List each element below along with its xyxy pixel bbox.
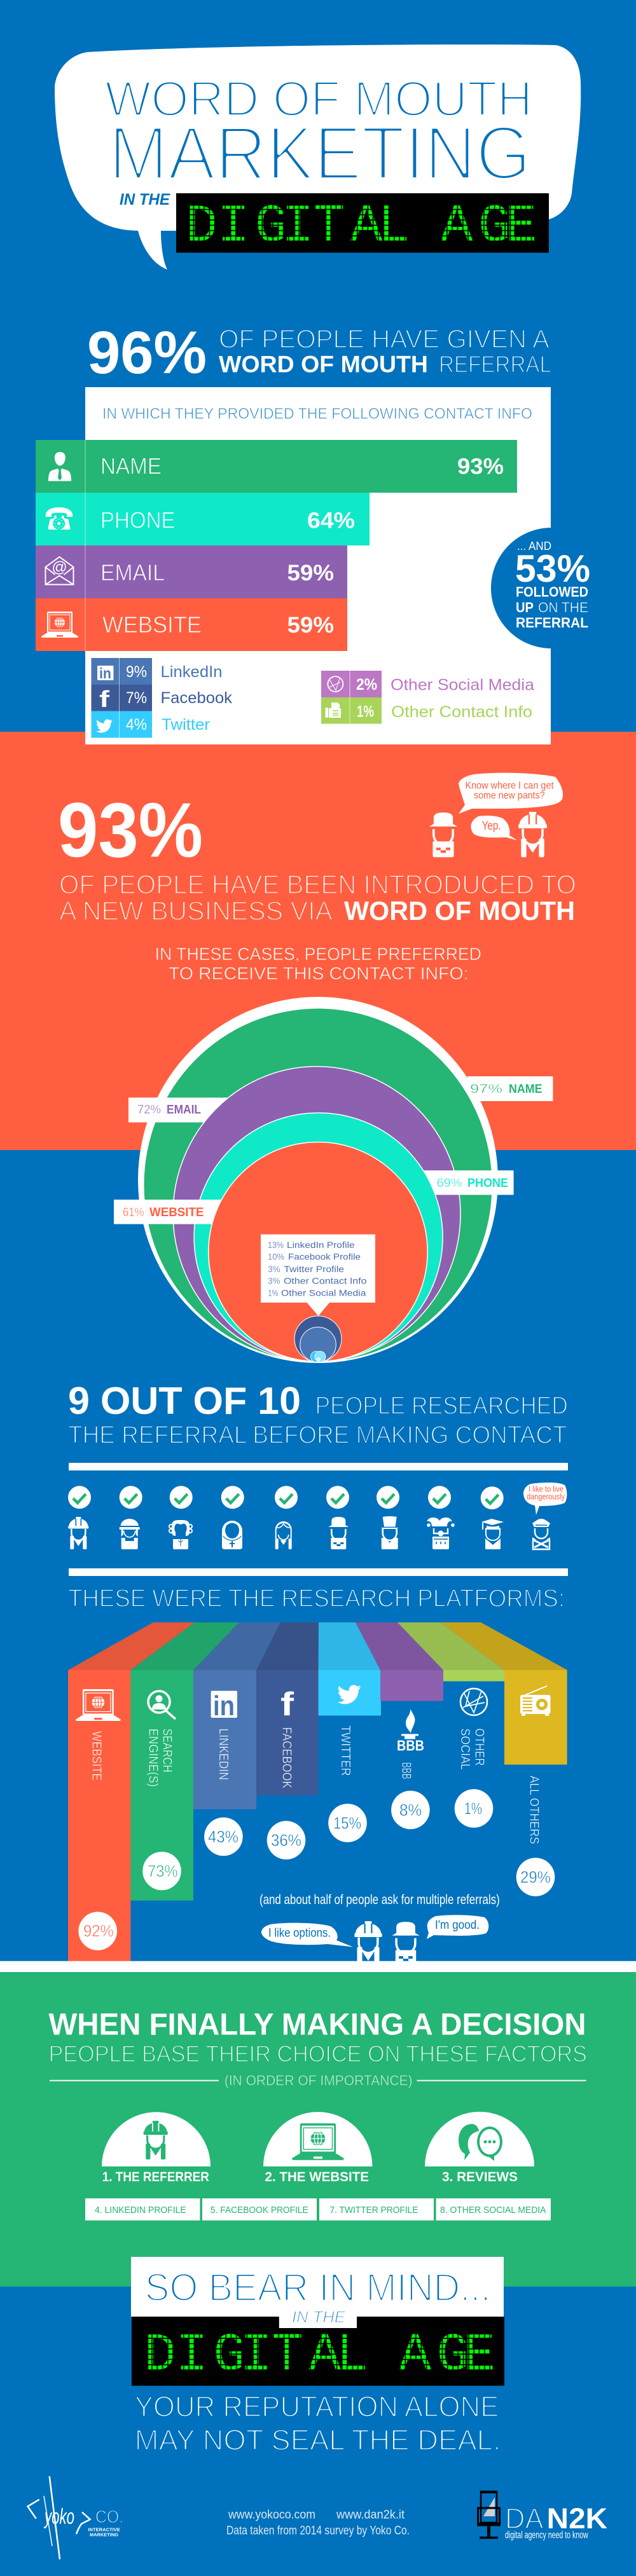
headline: introduced via word of mouth: WORD OF MOUTH bbox=[344, 896, 575, 926]
callout: smaller contact options: 13% bbox=[268, 1240, 284, 1250]
column: facebook: FACEBOOK bbox=[280, 1727, 294, 1789]
speech bubble: i like options: I like options. bbox=[268, 1926, 331, 1940]
logo: yoko co: CO. bbox=[95, 2507, 123, 2526]
bar: website: 59% bbox=[287, 613, 334, 638]
column: other social: OTHER bbox=[472, 1729, 486, 1766]
label: 72 percent email: 72% bbox=[137, 1103, 161, 1117]
title line: word of mouth: WORD OF MOUTH bbox=[105, 71, 532, 127]
panel: contact info bbox=[36, 387, 612, 744]
factor 8: other social media: 8. OTHER SOCIAL MEDIA bbox=[440, 2205, 546, 2216]
column: linkedin: in bbox=[213, 1690, 235, 1722]
factor 8: other social media bbox=[436, 2198, 551, 2221]
legend: twitter bbox=[92, 711, 210, 737]
factor 4: linkedin profile bbox=[85, 2198, 200, 2221]
column: website bbox=[68, 1622, 195, 1961]
label: 97 percent name bbox=[467, 1076, 553, 1101]
factor 7: twitter profile: 7. TWITTER PROFILE bbox=[329, 2205, 418, 2216]
column: facebook bbox=[256, 1622, 319, 1860]
in the tab: IN THE bbox=[292, 2308, 345, 2326]
in the label: IN THE bbox=[120, 191, 170, 209]
column: search engines: 73% bbox=[148, 1861, 178, 1881]
speech bubble: i like to live dangerously: dangerously bbox=[527, 1493, 565, 1502]
label: 72 percent email: EMAIL bbox=[167, 1103, 201, 1117]
column: twitter: 15% bbox=[333, 1813, 361, 1832]
speech bubble: i like to live dangerously: I like to live bbox=[529, 1485, 563, 1494]
column: facebook: 36% bbox=[271, 1831, 301, 1850]
footer credits: www.yokoco.com bbox=[228, 2509, 315, 2522]
callout: smaller contact options: LinkedIn Profile bbox=[287, 1240, 355, 1250]
callout: 53 percent followed up: FOLLOWED bbox=[516, 584, 588, 600]
callout: 53 percent followed up: 53% bbox=[515, 547, 590, 590]
column: other social: 1% bbox=[464, 1799, 482, 1818]
speech bubble: yep: Yep. bbox=[482, 819, 501, 833]
legend: facebook: Facebook bbox=[160, 689, 233, 707]
legend: other contact info bbox=[321, 697, 532, 723]
closing message: MAY NOT SEAL THE DEAL. bbox=[135, 2424, 501, 2456]
headline: introduced via word of mouth: A NEW BUSINESS VIA bbox=[59, 896, 333, 926]
headline: 96 percent: WORD OF MOUTH bbox=[219, 351, 428, 378]
headline: 96 percent bbox=[87, 319, 551, 387]
column: search engines: SEARCH bbox=[160, 1729, 174, 1772]
callout: 53 percent followed up bbox=[491, 528, 612, 648]
footer credits: www.dan2k.it bbox=[336, 2509, 405, 2522]
speech bubble: yep bbox=[471, 816, 517, 840]
closing heading: so bear in mind: SO BEAR IN MIND... bbox=[145, 2266, 491, 2309]
label: 61 percent website bbox=[114, 1200, 228, 1224]
legend: facebook bbox=[92, 685, 233, 712]
factor 2: the website: 2. THE WEBSITE bbox=[265, 2170, 369, 2184]
factor 3: reviews bbox=[425, 2112, 534, 2184]
label: 61 percent website: 61% bbox=[123, 1205, 144, 1219]
column: search engines bbox=[130, 1622, 239, 1901]
legend: twitter: 4% bbox=[126, 716, 147, 734]
callout: smaller contact options: 1% bbox=[268, 1288, 278, 1298]
callout: smaller contact options: 3% bbox=[268, 1277, 280, 1286]
column: other social: SOCIAL bbox=[458, 1729, 472, 1770]
speech bubble: i like options bbox=[261, 1923, 353, 1947]
label: 69 percent phone: 69% bbox=[437, 1176, 462, 1190]
title speech bubble bbox=[55, 45, 581, 270]
legend: other contact info: 1% bbox=[357, 703, 374, 721]
headline: 96 percent: REFERRAL bbox=[439, 351, 551, 378]
headline: 96 percent: OF PEOPLE HAVE GIVEN A bbox=[219, 324, 550, 353]
legend: facebook: f bbox=[99, 686, 110, 712]
closing message: YOUR REPUTATION ALONE bbox=[135, 2390, 499, 2423]
column: twitter bbox=[319, 1622, 381, 1842]
callout: smaller contact options: Other Contact Info bbox=[284, 1277, 366, 1286]
logo: yoko co bbox=[28, 2476, 123, 2559]
column: linkedin: LINKEDIN bbox=[216, 1729, 230, 1780]
legend: other social media: 2% bbox=[356, 676, 377, 694]
factor 7: twitter profile bbox=[319, 2198, 434, 2221]
row: checkmarks bbox=[68, 1486, 504, 1509]
factor 1: the referrer bbox=[102, 2112, 211, 2184]
subheading: preferred contact info bbox=[155, 944, 481, 983]
legend: linkedin: LinkedIn bbox=[160, 663, 223, 681]
heading: research platforms: THESE WERE THE RESEARCH PLATFORMS: bbox=[68, 1585, 565, 1612]
footer credits bbox=[226, 2509, 410, 2538]
legend: other social media: Other Social Media bbox=[391, 676, 534, 694]
column: all others: ALL OTHERS bbox=[527, 1776, 541, 1844]
bar: email: @ bbox=[52, 559, 67, 576]
factor 4: linkedin profile: 4. LINKEDIN PROFILE bbox=[95, 2205, 186, 2216]
icon: worker left bbox=[354, 1921, 382, 1965]
bar: name bbox=[36, 440, 517, 493]
callout: smaller contact options bbox=[261, 1235, 375, 1316]
bar: phone: PHONE bbox=[100, 507, 176, 533]
legend: facebook: 7% bbox=[126, 689, 147, 707]
factor 1: the referrer: 1. THE REFERRER bbox=[102, 2170, 209, 2184]
closing LED sign: DIGITAL AGE bbox=[144, 2326, 495, 2387]
closing panel bbox=[131, 2257, 504, 2387]
chart: research platforms bbox=[68, 1622, 567, 1961]
column: website: WEBSITE bbox=[89, 1731, 103, 1781]
column: bbb bbox=[356, 1622, 443, 1829]
logo: dan2k: digital agency need to know bbox=[505, 2530, 588, 2541]
factor 5: facebook profile bbox=[202, 2198, 317, 2221]
headline: decision factors bbox=[48, 2008, 587, 2067]
headline: decision factors: PEOPLE BASE THEIR CHOICE ON THESE FACTORS bbox=[48, 2041, 587, 2067]
bar: email: EMAIL bbox=[100, 559, 165, 586]
headline: 9 out of 10: THE REFERRAL BEFORE MAKING CONTACT bbox=[68, 1422, 567, 1449]
conversation: multiple referrals bbox=[261, 1915, 488, 1966]
in the tab bbox=[279, 2308, 357, 2328]
column: all others bbox=[441, 1622, 567, 1896]
speech bubble: i am good bbox=[427, 1915, 488, 1939]
label: 69 percent phone: PHONE bbox=[467, 1176, 508, 1190]
circle: twitter profile bbox=[310, 1352, 322, 1362]
logo: yoko co: INTERACTIVE bbox=[88, 2528, 120, 2533]
icon: microphone bbox=[478, 2491, 500, 2539]
headline: 96 percent: 96% bbox=[87, 319, 207, 387]
section background: orange bbox=[0, 732, 636, 1150]
column: bbb: 8% bbox=[399, 1800, 422, 1819]
divider bar bottom bbox=[69, 1568, 568, 1576]
circle: name bbox=[144, 1008, 492, 1362]
digital age LED sign: DIGITAL AGE bbox=[186, 197, 537, 257]
callout: 53 percent followed up: ... AND bbox=[517, 540, 551, 552]
speech bubble: i like to live dangerously bbox=[523, 1483, 567, 1515]
circle: other contact info bbox=[315, 1352, 326, 1362]
callout: 53 percent followed up: REFERRAL bbox=[516, 615, 588, 631]
bar: email bbox=[36, 545, 347, 598]
headline: decision factors: WHEN FINALLY MAKING A DECISION bbox=[48, 2008, 586, 2042]
headline: introduced via word of mouth: OF PEOPLE HAVE BEEN INTRODUCED TO bbox=[59, 870, 576, 900]
headline: 9 out of 10 bbox=[68, 1380, 568, 1449]
callout: smaller contact options: 3% bbox=[268, 1264, 280, 1274]
bar: phone: 64% bbox=[307, 509, 355, 533]
label: 69 percent phone bbox=[413, 1170, 514, 1195]
circle: phone bbox=[194, 1113, 443, 1362]
circle: other social media bbox=[317, 1358, 321, 1362]
bar: email: 59% bbox=[287, 561, 334, 586]
white divider band bbox=[0, 1961, 636, 1972]
nested circles chart bbox=[114, 997, 553, 1363]
label: 97 percent name: NAME bbox=[509, 1082, 542, 1096]
row: ten people icons bbox=[68, 1516, 550, 1549]
column: bbb: BBB bbox=[399, 1762, 413, 1779]
divider bar top bbox=[69, 1463, 568, 1470]
headline: introduced via word of mouth bbox=[59, 870, 576, 926]
circle: website bbox=[209, 1142, 427, 1362]
logo: dan2k: N2K bbox=[547, 2502, 608, 2535]
circle: facebook profile bbox=[294, 1316, 342, 1362]
icon: worker right bbox=[518, 812, 547, 857]
title line: marketing: MARKETING bbox=[109, 111, 531, 196]
bar: name: NAME bbox=[100, 453, 162, 479]
headline: 9 out of 10: 9 OUT OF 10 bbox=[68, 1380, 301, 1422]
speech bubble: know where: some new pants? bbox=[474, 790, 545, 801]
callout: smaller contact options: Facebook Profile bbox=[288, 1252, 361, 1262]
legend: other contact info: Other Contact Info bbox=[391, 703, 532, 721]
label: 72 percent email bbox=[128, 1097, 230, 1123]
bar: phone bbox=[36, 493, 370, 545]
column: search engines: ENGINE(S) bbox=[146, 1729, 160, 1787]
logo: dan2k bbox=[478, 2491, 608, 2541]
legend: twitter: Twitter bbox=[162, 716, 210, 734]
factor 2: the website bbox=[263, 2112, 373, 2184]
callout: 53 percent followed up: UP bbox=[516, 599, 534, 615]
callout: smaller contact options: Other Social Media bbox=[281, 1288, 366, 1298]
big stat: 93 percent: 93% bbox=[58, 787, 203, 874]
column: website: 92% bbox=[83, 1921, 114, 1940]
closing message bbox=[135, 2390, 501, 2456]
subheading: preferred contact info: TO RECEIVE THIS CONTACT INFO: bbox=[169, 964, 469, 983]
logo: dan2k: DA bbox=[505, 2502, 544, 2535]
callout: smaller contact options: Twitter Profile bbox=[284, 1264, 344, 1274]
column: facebook: f bbox=[280, 1686, 294, 1723]
column: bbb: BBB bbox=[397, 1737, 424, 1754]
bar: website bbox=[36, 598, 347, 651]
column: linkedin: 43% bbox=[208, 1827, 238, 1846]
column: other social bbox=[398, 1622, 504, 1828]
speech bubble: i am good: I'm good. bbox=[435, 1919, 480, 1932]
bar: website: WEBSITE bbox=[102, 612, 202, 638]
subheading: preferred contact info: IN THESE CASES, PEOPLE PREFERRED bbox=[155, 944, 481, 964]
legend: linkedin bbox=[92, 658, 223, 685]
label: 61 percent website: WEBSITE bbox=[149, 1205, 204, 1219]
conversation: workers asking about pants bbox=[429, 773, 563, 857]
column: linkedin bbox=[193, 1622, 280, 1856]
speech bubble: know where: Know where I can get bbox=[466, 781, 554, 791]
callout: 53 percent followed up: ON THE bbox=[538, 599, 588, 615]
legend: other social media bbox=[321, 671, 534, 697]
icon: worker right bbox=[392, 1922, 420, 1966]
icon: worker left bbox=[429, 812, 457, 857]
speech bubble: know where bbox=[459, 773, 563, 814]
column: twitter: TWITTER bbox=[338, 1725, 352, 1776]
circle: email bbox=[173, 1067, 460, 1362]
logo: yoko co: MARKETING bbox=[90, 2533, 119, 2538]
label: 97 percent name: 97% bbox=[470, 1082, 502, 1096]
note: multiple referrals: (and about half of people ask for multiple referrals) bbox=[259, 1893, 500, 1907]
bar: name: 93% bbox=[457, 455, 504, 479]
factor 5: facebook profile: 5. FACEBOOK PROFILE bbox=[211, 2205, 308, 2216]
subheading: in order of importance: (IN ORDER OF IMPORTANCE) bbox=[225, 2072, 413, 2088]
logo: yoko co: yoko bbox=[44, 2505, 74, 2529]
legend: linkedin: 9% bbox=[126, 663, 147, 681]
legend: linkedin: in bbox=[99, 665, 111, 682]
factor 3: reviews: 3. REVIEWS bbox=[442, 2170, 518, 2184]
circle: linkedin profile bbox=[300, 1327, 336, 1362]
panel intro text: IN WHICH THEY PROVIDED THE FOLLOWING CONTACT INFO bbox=[102, 406, 532, 422]
headline: 9 out of 10: PEOPLE RESEARCHED bbox=[315, 1392, 568, 1420]
column: all others: 29% bbox=[520, 1868, 551, 1887]
section background: green bbox=[0, 1972, 636, 2287]
callout: smaller contact options: 10% bbox=[268, 1252, 284, 1262]
footer credits: Data taken from 2014 survey by Yoko Co. bbox=[226, 2525, 410, 2538]
